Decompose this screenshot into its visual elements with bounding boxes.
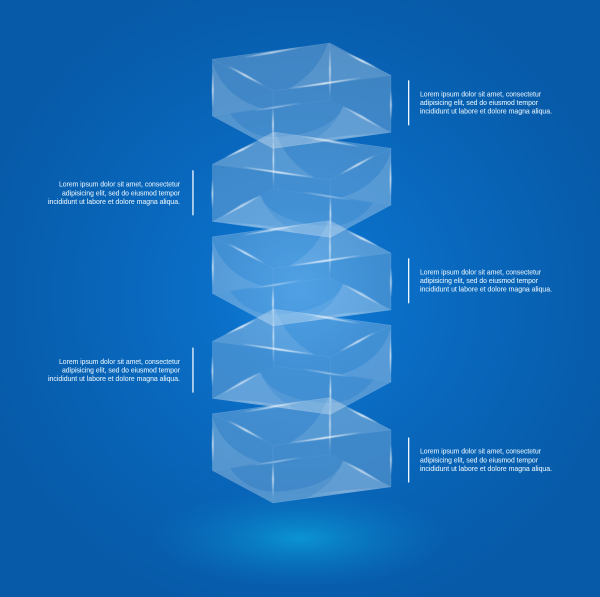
callout: lower left: incididunt ut labore et dolore magna aliqua. xyxy=(48,374,180,383)
callout: bottom right xyxy=(408,438,552,482)
glass box 2 xyxy=(212,132,391,238)
callout: top right: adipisicing elit, sed do eiusmod tempor xyxy=(420,98,539,107)
callout: top right: incididunt ut labore et dolore magna aliqua. xyxy=(420,107,552,116)
callout: middle right: incididunt ut labore et dolore magna aliqua. xyxy=(420,285,552,294)
callout: top right: Lorem ipsum dolor sit amet, consectetur xyxy=(420,89,542,98)
glass box 1 (top) xyxy=(212,43,392,148)
callout: middle right: adipisicing elit, sed do eiusmod tempor xyxy=(420,276,539,285)
callout: upper left xyxy=(48,170,194,215)
callout: lower left: Lorem ipsum dolor sit amet, consectetur xyxy=(59,357,181,366)
callout: lower left xyxy=(48,348,194,393)
callout: bottom right: incididunt ut labore et dolore magna aliqua. xyxy=(420,464,552,473)
callout: middle right: Lorem ipsum dolor sit amet, consectetur xyxy=(420,267,542,276)
callout: bottom right: adipisicing elit, sed do eiusmod tempor xyxy=(420,455,539,464)
glass box 3 xyxy=(212,220,392,326)
callout: upper left: incididunt ut labore et dolore magna aliqua. xyxy=(48,197,180,206)
glass box 5 (bottom) xyxy=(212,398,392,503)
callout: upper left: Lorem ipsum dolor sit amet, consectetur xyxy=(59,180,181,189)
glass box 4 xyxy=(212,309,391,414)
callout: top right xyxy=(408,80,552,125)
callout: bottom right: Lorem ipsum dolor sit amet, consectetur xyxy=(420,447,542,456)
callout: lower left: adipisicing elit, sed do eiusmod tempor xyxy=(62,366,181,374)
callout: upper left: adipisicing elit, sed do eiusmod tempor xyxy=(62,188,181,197)
callout: middle right xyxy=(408,258,552,303)
